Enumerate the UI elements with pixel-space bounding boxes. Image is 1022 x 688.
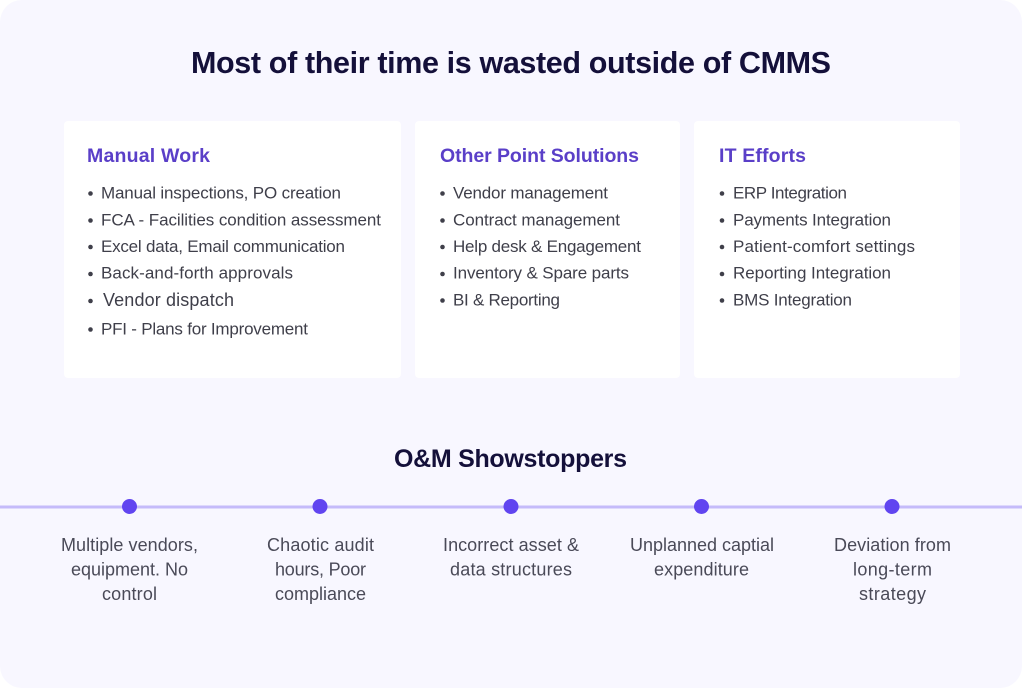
list: it efforts: Patient-comfort settings xyxy=(733,237,915,256)
text: data structures: data structures xyxy=(450,560,572,580)
list: manual work xyxy=(88,184,381,338)
panel: it efforts xyxy=(694,121,960,378)
list: it efforts: Reporting Integration xyxy=(733,264,891,282)
text: strategy: Deviation from xyxy=(834,535,951,555)
panel: other point solutions xyxy=(415,121,680,378)
text: data structures xyxy=(443,535,579,580)
text: vendors xyxy=(61,535,198,604)
list: manual work: Manual inspections, PO creation xyxy=(101,184,341,202)
list: it efforts: ERP Integration xyxy=(733,184,847,202)
text: strategy xyxy=(834,535,951,604)
list: other point solutions: Vendor management xyxy=(453,184,608,202)
title: Most of their time is wasted outside of CMMS xyxy=(191,46,831,80)
list: it efforts: BMS Integration xyxy=(733,290,852,310)
timeline xyxy=(0,499,1022,514)
text: capital: expenditure xyxy=(654,560,749,580)
list: it efforts: Payments Integration xyxy=(733,210,891,230)
list: other point solutions xyxy=(440,184,641,310)
list: other point solutions: BI & Reporting xyxy=(453,290,560,310)
list: other point solutions: Contract management xyxy=(453,210,620,230)
list: manual work: Back-and-forth approvals xyxy=(101,264,293,282)
heading: showstoppers: O&M Showstoppers xyxy=(394,445,627,473)
list: manual work: Excel data, Email communication xyxy=(101,237,345,256)
list: manual work: FCA - Facilities condition assessment xyxy=(101,210,381,230)
list: manual work: Vendor dispatch xyxy=(103,290,234,310)
list: it efforts xyxy=(720,184,915,310)
text: strategy: strategy xyxy=(859,584,926,604)
heading: it efforts: IT Efforts xyxy=(719,145,806,167)
heading: manual work: Manual Work xyxy=(87,145,210,167)
text: audit: compliance xyxy=(275,584,366,604)
heading: other point solutions: Other Point Solutions xyxy=(440,145,639,167)
text: vendors: control xyxy=(102,584,157,604)
text: vendors: Multiple vendors, xyxy=(61,535,198,555)
text: capital xyxy=(630,535,774,580)
text: data structures: Incorrect asset & xyxy=(443,535,579,555)
text: audit: hours, Poor xyxy=(275,560,366,580)
text: audit xyxy=(267,535,374,604)
text: capital: Unplanned captial xyxy=(630,535,774,555)
list: other point solutions: Inventory & Spare parts xyxy=(453,264,629,282)
list: other point solutions: Help desk & Engagement xyxy=(453,237,641,256)
text: vendors: equipment. No xyxy=(71,560,188,580)
list: manual work: PFI - Plans for Improvement xyxy=(101,320,308,338)
text: audit: Chaotic audit xyxy=(267,535,374,555)
panel: manual work xyxy=(64,121,401,378)
text: strategy: long-term xyxy=(853,560,932,580)
